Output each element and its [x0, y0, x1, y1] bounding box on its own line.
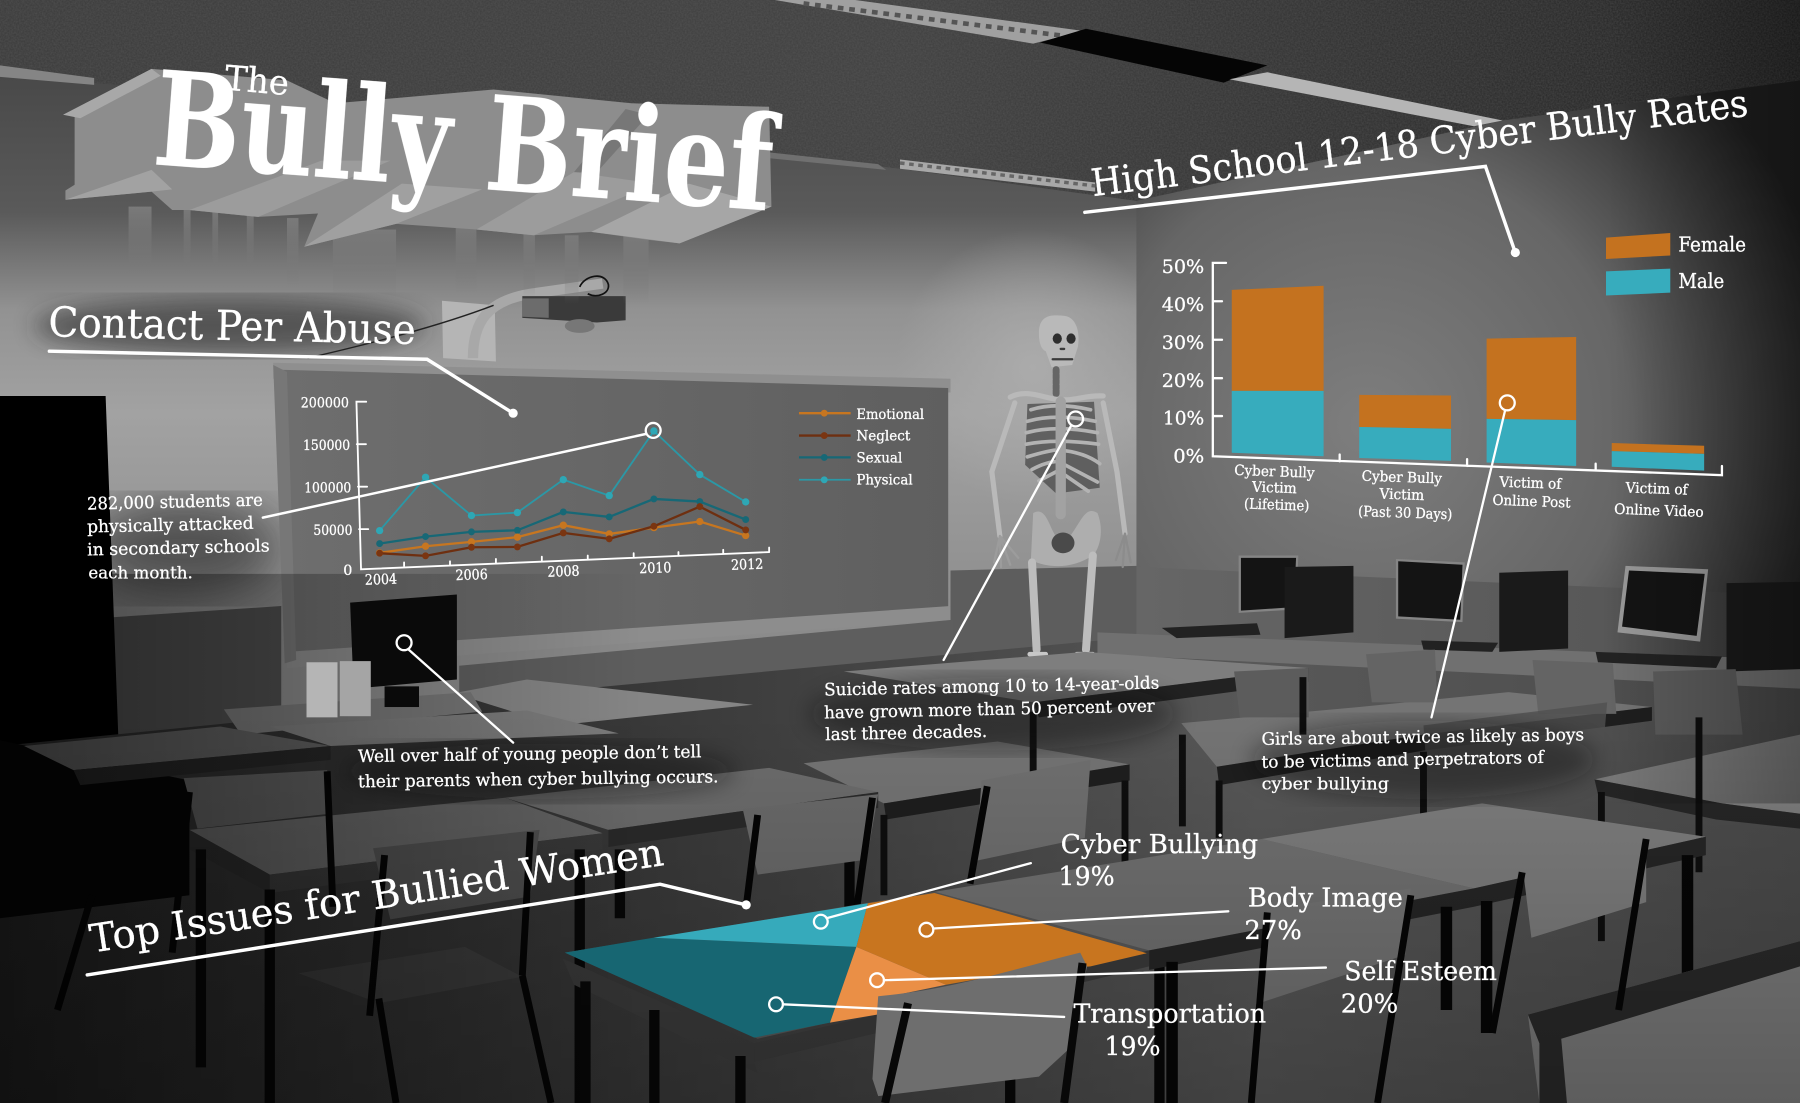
- chart callout: transportation: 19%: [1104, 1031, 1161, 1062]
- callout: physical attacks: 282,000 students are: [87, 491, 263, 515]
- black teacher monitor and speakers: [307, 595, 457, 717]
- x axis labels: 2010: [639, 560, 672, 577]
- callout: girls: Girls are about twice as likely as boys: [1261, 725, 1584, 750]
- title: The: The: [223, 59, 291, 104]
- x axis labels: Cyber Bully: [1234, 463, 1316, 482]
- x axis labels: Victim: [1251, 480, 1297, 497]
- callout: suicide rates: [824, 411, 1159, 745]
- segment: body image: [856, 893, 1147, 985]
- heading: Contact Per Abuse: [48, 298, 416, 354]
- x axis labels: [1234, 463, 1704, 523]
- bar 4: [1612, 443, 1704, 471]
- segment: transportation: [565, 938, 856, 1038]
- chart callout: body image: 27%: [1244, 915, 1302, 946]
- callout: physical attacks: in secondary schools: [87, 536, 270, 561]
- x axis labels: (Lifetime): [1244, 496, 1310, 515]
- panel: high school cyber bully rates: [1085, 81, 1750, 795]
- bar 2: [1359, 395, 1451, 461]
- perspective share chart on desk: [565, 893, 1147, 1103]
- y axis labels: 0: [343, 563, 352, 579]
- title: Bully Brief: Bully Brief: [149, 41, 785, 242]
- chart callout: transportation: [769, 997, 1266, 1062]
- x axis labels: Online Video: [1614, 502, 1704, 521]
- leader line: [49, 351, 513, 413]
- bar chart: [1162, 232, 1746, 523]
- y axis labels: 50000: [313, 523, 352, 539]
- classroom desks and chairs: [24, 650, 1800, 1103]
- segment: self esteem: [830, 947, 946, 1023]
- callout: parents: Well over half of young people don’t tell: [358, 742, 701, 767]
- y axis labels: 20%: [1162, 370, 1204, 392]
- line chart: [301, 395, 924, 589]
- y axis labels: 100000: [304, 480, 351, 496]
- front desk with chart: [565, 892, 1149, 1039]
- chart callout: body image: Body Image: [1248, 883, 1403, 914]
- series: sexual: [376, 495, 749, 547]
- callout: suicide rates: Suicide rates among 10 to 14-year-olds: [824, 674, 1159, 701]
- series: emotional: [376, 518, 749, 557]
- leader line: [1085, 166, 1515, 253]
- row 3 desks: [189, 798, 603, 875]
- chart callout: self esteem: 20%: [1341, 988, 1398, 1019]
- bar legend: Female: [1678, 232, 1746, 256]
- x axis labels: Victim of: [1624, 480, 1690, 499]
- heading: Top Issues for Bullied Women: [87, 830, 666, 963]
- y axis labels: 50%: [1162, 256, 1204, 278]
- callout: parents: their parents when cyber bullying occurs.: [358, 767, 719, 792]
- floor: [0, 637, 1800, 1103]
- x axis labels: 2004: [365, 572, 397, 589]
- black cabinet: [0, 396, 118, 758]
- y axis labels: 0%: [1173, 446, 1204, 468]
- rib cage: [1025, 402, 1100, 494]
- chairs back row: [1366, 650, 1437, 702]
- lower left wall: [109, 606, 281, 758]
- callout: suicide rates: last three decades.: [825, 722, 987, 745]
- chart legend: Physical: [856, 472, 913, 488]
- x axis labels: Cyber Bully: [1361, 469, 1443, 487]
- right wall: [1136, 80, 1800, 689]
- x axis labels: Victim of: [1498, 475, 1563, 493]
- panel: contact per abuse: [48, 298, 924, 589]
- callout: physical attacks: [87, 423, 661, 583]
- x axis labels: [365, 557, 764, 589]
- axes: [1213, 263, 1722, 475]
- y axis labels: 150000: [303, 438, 350, 454]
- x axis labels: (Past 30 Days): [1358, 504, 1453, 523]
- bar legend: Male: [1678, 269, 1724, 293]
- callout: physical attacks: physically attacked: [87, 514, 254, 538]
- y axis labels: [1162, 256, 1204, 468]
- chart callout: body image: [920, 883, 1403, 946]
- y axis labels: 30%: [1162, 332, 1204, 354]
- chart callout: self esteem: [870, 956, 1497, 1019]
- series: physical: [376, 427, 749, 534]
- front chair: [872, 953, 1087, 1096]
- chart callout: cyber bullying: [814, 829, 1258, 929]
- ceiling: [0, 0, 1800, 201]
- callout: girls: [1261, 395, 1584, 795]
- x axis labels: 2008: [547, 564, 580, 581]
- computer desks at back right: [1097, 556, 1800, 689]
- left wall: [0, 75, 1136, 803]
- callout: physical attacks: each month.: [88, 563, 193, 583]
- bar 3: [1487, 337, 1576, 466]
- chart callout: cyber bullying: 19%: [1058, 861, 1115, 892]
- chart callout: self esteem: Self Esteem: [1344, 956, 1497, 987]
- chart callout: cyber bullying: Cyber Bullying: [1061, 829, 1258, 860]
- chair backs: [184, 770, 329, 829]
- whiteboard: [273, 363, 951, 668]
- segment: cyber bullying: [653, 903, 868, 947]
- axes: [356, 402, 769, 569]
- callout: girls: cyber bullying: [1262, 775, 1389, 795]
- y axis labels: 200000: [301, 395, 349, 411]
- heading: High School 12-18 Cyber Bully Rates: [1089, 81, 1750, 205]
- x axis labels: Online Post: [1492, 493, 1571, 512]
- chart legend: Sexual: [856, 451, 903, 467]
- x axis labels: Victim: [1378, 486, 1425, 504]
- leader line: [87, 884, 746, 975]
- callout: suicide rates: have grown more than 50 percent over: [824, 697, 1156, 723]
- bar legend: [1606, 232, 1746, 296]
- projector on wall mount: [308, 276, 626, 362]
- skull: [1039, 315, 1079, 367]
- right desks: [934, 839, 1474, 950]
- title: [149, 41, 785, 242]
- y axis labels: 40%: [1162, 294, 1204, 316]
- skeleton: [992, 315, 1131, 654]
- bar 1: [1232, 286, 1324, 456]
- x axis labels: 2012: [731, 557, 764, 574]
- chart legend: Neglect: [856, 429, 911, 445]
- ceiling light strips: [775, 0, 1084, 44]
- callout: parents: [358, 635, 719, 792]
- chart callout: transportation: Transportation: [1073, 999, 1266, 1030]
- chart legend: Emotional: [856, 407, 924, 423]
- y axis labels: 10%: [1163, 408, 1204, 430]
- chart legend: [799, 407, 924, 488]
- x axis labels: 2006: [455, 567, 488, 584]
- panel: top issues for bullied women: [87, 829, 1497, 1103]
- 3D extruded title block: [63, 69, 771, 304]
- y axis labels: [301, 395, 352, 579]
- series: neglect: [376, 503, 749, 559]
- callout: girls: to be victims and perpetrators of: [1261, 748, 1546, 773]
